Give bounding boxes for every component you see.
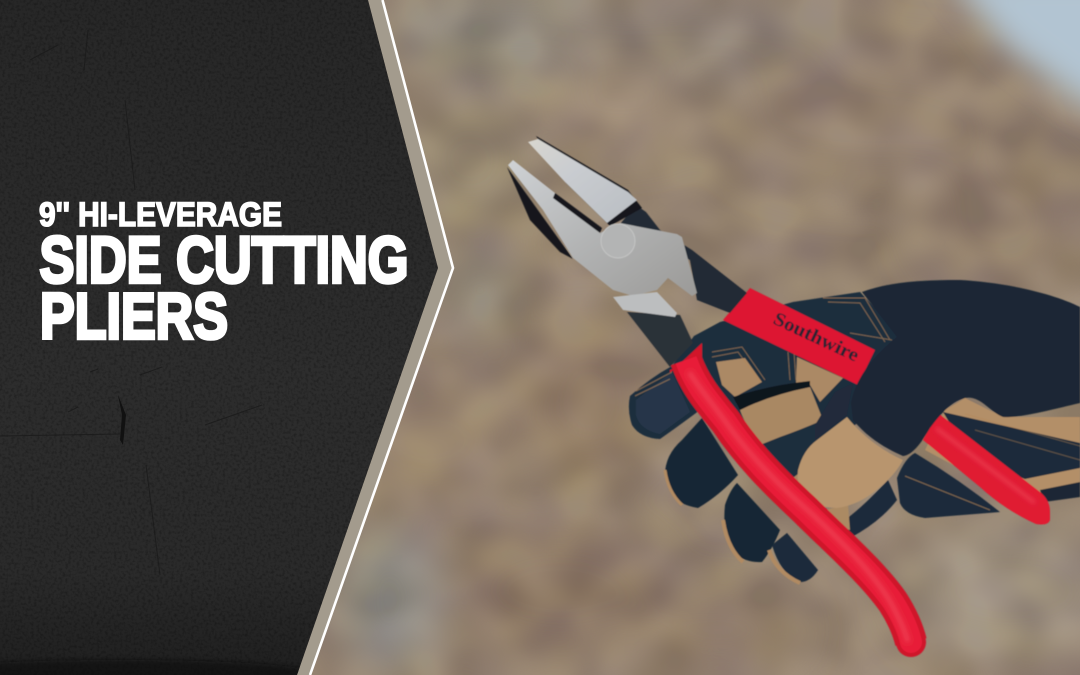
- glove: dark shadow between fingers: [733, 381, 810, 410]
- glove: tan under fingers: [765, 430, 820, 500]
- glove: dark palm and thumb base: [629, 292, 900, 480]
- glove: smooth blue-black palm highlight: [636, 372, 690, 434]
- glove: lower right dark panel: [897, 453, 1000, 518]
- glove: thumb mesh back of hand: [851, 280, 1080, 456]
- panel fill: [0, 0, 438, 675]
- panel white outline: [310, 0, 453, 675]
- plier: lower dark handle: [627, 312, 693, 367]
- plier: pivot and lower jaw: [508, 160, 697, 296]
- title line: Side Cutting: SIDE CUTTING: [40, 222, 408, 296]
- glove: palm bottom: [842, 480, 897, 538]
- glove: tan palm patch right: [796, 357, 843, 402]
- handle: rear segment highlight: [936, 428, 1035, 503]
- title: [39, 196, 408, 352]
- plier: upper dark handle: [620, 205, 747, 313]
- handle: Southwire wordmark: Southwire: [770, 308, 862, 366]
- plier: long red handle: [670, 343, 926, 657]
- glove: tan middle finger: [740, 387, 823, 445]
- panel: dark textured chevron: [0, 0, 460, 675]
- photo: gloved hand holding pliers: [507, 136, 1080, 657]
- handle: upper red grip rear segment: [923, 413, 1050, 524]
- glove: cuff lower strip: [1040, 482, 1080, 502]
- glove: dark strip beside thumb: [815, 383, 853, 440]
- glove: right cuff dark panel: [943, 412, 1080, 479]
- glove: stitching: [635, 298, 1080, 510]
- glove: finger three: [769, 533, 818, 583]
- plier: handle highlight: [689, 372, 908, 642]
- plier: upper jaw: [528, 136, 642, 226]
- plier: pivot rivet: [601, 224, 635, 258]
- glove: right cuff tan strip: [925, 398, 1080, 499]
- plier: lower jaw dark edge: [507, 167, 573, 259]
- panel scratches texture: [0, 0, 460, 675]
- glove: tan palm patch left: [716, 358, 762, 397]
- glove: palm edge tan: [818, 504, 850, 530]
- plier: jaw slot: [553, 193, 602, 233]
- handle: upper red grip: [723, 288, 875, 385]
- panel bevel band: [297, 0, 453, 675]
- glove: finger one: [665, 418, 738, 508]
- glove: finger two: [723, 483, 780, 562]
- glove: tan thumb: [798, 417, 903, 508]
- title line: Pliers: PLIERS: [40, 279, 228, 352]
- plier: lower metal tang: [613, 292, 677, 317]
- title line: 9" Hi-Leverage: 9'' HI-LEVERAGE: [39, 196, 282, 234]
